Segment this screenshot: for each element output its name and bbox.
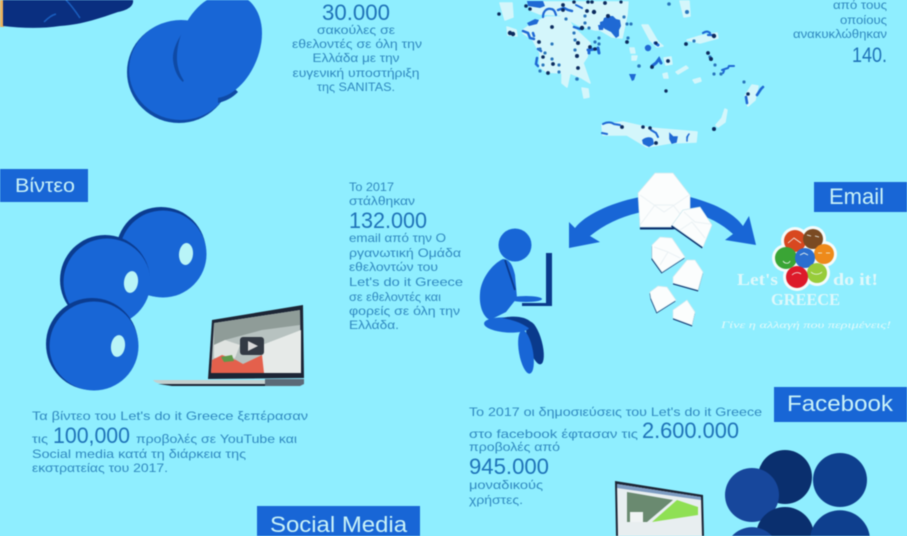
text: email stat: Let's do it Greece xyxy=(349,275,463,289)
panel: email illustration xyxy=(480,173,891,375)
text: bags stat: Ελλάδα με την xyxy=(312,51,400,65)
text: facebook stat: 2.600.000 xyxy=(642,418,739,443)
collection points: small blue dots xyxy=(538,2,746,84)
icon: hand with glove xyxy=(0,0,133,28)
icon: laptop playing video xyxy=(153,305,304,386)
text: email stat: εθελοντών του xyxy=(349,260,438,274)
logo: Let's do it Greece: GREECE xyxy=(771,290,840,309)
heading: Βίντεο xyxy=(0,169,88,202)
text: email stat: Το 2017 xyxy=(349,180,394,194)
logo: Let's do it Greece: Γίνε η αλλαγή που περιμένεις! xyxy=(719,320,891,330)
text: facebook stat: Το 2017 οι δημοσιεύσεις του Let's do it Greece xyxy=(469,405,762,419)
text: bags stat: της SANITAS. xyxy=(317,80,395,94)
text: bags stat xyxy=(292,0,422,94)
text: facebook stat: 945.000 xyxy=(469,454,549,479)
text: recycling stat xyxy=(793,0,887,67)
text: bags stat: ευγενική υποστήριξη xyxy=(292,66,420,80)
collection points: dark xyxy=(497,0,750,145)
icon: envelopes xyxy=(638,173,712,326)
text: video stat: 100,000 xyxy=(53,423,130,448)
text: email stat: σε εθελοντές και xyxy=(349,290,441,304)
logo: Let's do it Greece: Let's xyxy=(737,270,778,289)
heading: Facebook: Facebook xyxy=(787,391,894,416)
text: video stat: Τα βίντεο του Let's do it Greece ξεπέρασαν xyxy=(32,409,308,423)
text: bags stat: εθελοντές σε όλη την xyxy=(292,37,422,51)
text: facebook stat: χρήστες. xyxy=(469,493,523,507)
text: video stat: Social media κατά τη διάρκεια της xyxy=(32,447,246,461)
land xyxy=(500,1,758,147)
icon: blue discs with highlights xyxy=(46,207,206,390)
text: video stat xyxy=(32,409,308,475)
text: recycling stat: οποίους xyxy=(840,13,887,27)
icon: seated person at laptop xyxy=(480,228,552,375)
text: email stat xyxy=(349,180,463,332)
text: email stat: φορείς σε όλη την xyxy=(349,304,460,318)
text: video stat: προβολές σε YouTube και xyxy=(136,432,297,446)
text: facebook stat: στο facebook έφτασαν τις xyxy=(469,427,638,441)
collection points: blue blobs and coast lines xyxy=(523,1,763,147)
logo: Let's do it Greece: do it! xyxy=(833,270,878,289)
text: facebook stat: μοναδικούς xyxy=(469,478,543,492)
text: video stat: εκστρατείας του 2017. xyxy=(32,461,168,475)
text: recycling stat: 140. xyxy=(852,44,887,67)
text: email stat: στάλθηκαν xyxy=(349,194,415,208)
text: video stat: τις xyxy=(32,432,48,446)
map: Greece with collection points xyxy=(497,0,763,147)
heading: Social Media xyxy=(257,506,420,536)
arrow: right xyxy=(690,197,756,245)
heading: Email: Email xyxy=(829,184,884,209)
heading: Facebook xyxy=(774,387,907,422)
text: email stat: email από την Ο xyxy=(349,231,446,245)
icon: dark blue discs xyxy=(725,450,870,536)
logo: Let's do it Greece xyxy=(719,226,891,330)
text: facebook stat xyxy=(469,405,762,507)
text: recycling stat: ανακυκλώθηκαν xyxy=(793,27,887,41)
text: email stat: 132.000 xyxy=(349,208,427,233)
text: bags stat: σακούλες σε xyxy=(317,23,396,37)
heading: Email xyxy=(814,182,907,212)
text: email stat: ργανωτική Ομάδα xyxy=(349,246,461,260)
panel: video icons xyxy=(46,207,304,390)
arrow: left xyxy=(569,197,642,248)
icon: laptop with facebook page xyxy=(615,481,704,536)
panel: bags handed out xyxy=(0,0,422,123)
icon: stacked blue discs xyxy=(127,0,262,123)
text: bags stat: 30.000 xyxy=(322,0,390,25)
text: email stat: Ελλάδα. xyxy=(349,318,399,332)
heading: Βίντεο: Βίντεο xyxy=(15,176,75,197)
text: facebook stat: προβολές από xyxy=(469,440,560,454)
